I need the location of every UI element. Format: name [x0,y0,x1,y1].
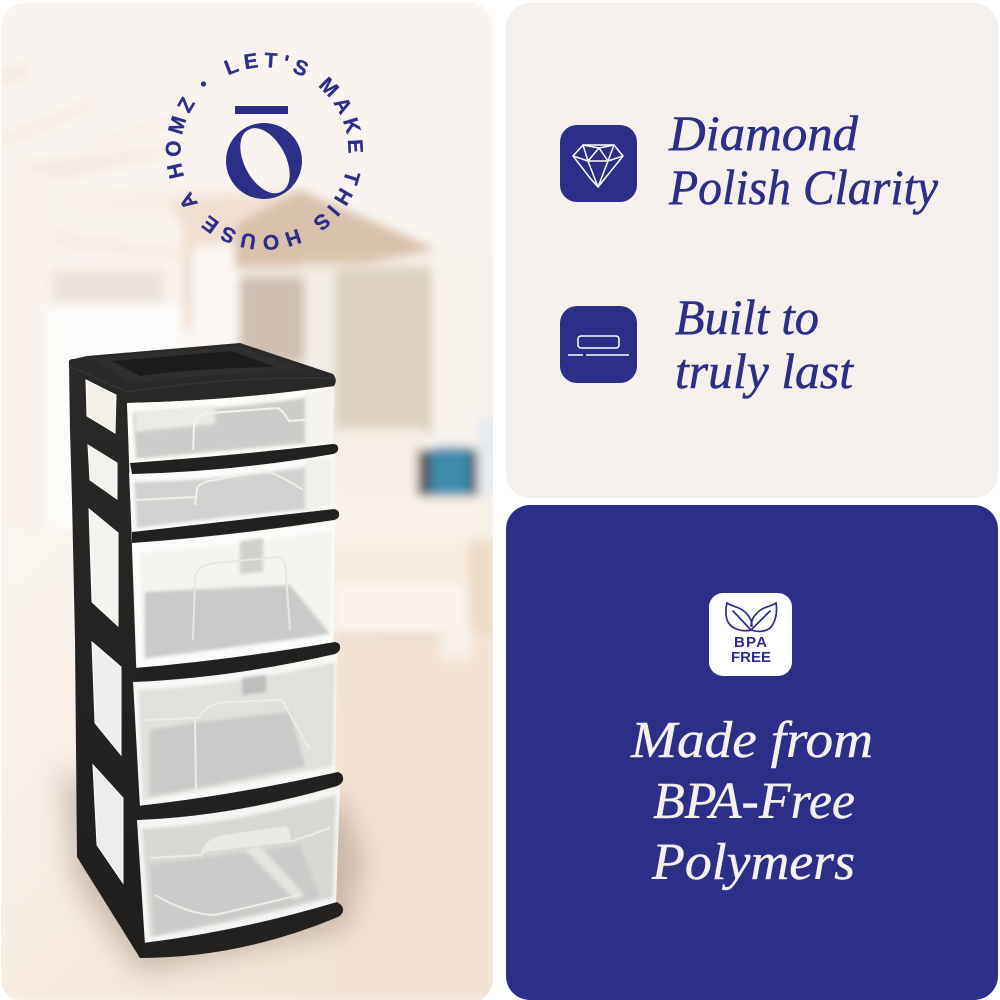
heading: made from bpa-free polymers: Made from [630,712,873,769]
product: five drawer unit [69,343,343,958]
drawer rails [130,444,343,958]
heading: made from bpa-free polymers: Polymers [651,834,855,891]
icon: bpa free badge: BPA [734,634,767,651]
heading: diamond polish clarity: Polish Clarity [668,159,939,215]
icon: bpa free badge [709,593,792,676]
heading: built to truly last [675,289,854,399]
side windows [86,380,123,883]
unit frame [69,343,336,958]
heading: diamond polish clarity: Diamond [668,105,859,161]
icon: durable bar [560,306,637,383]
heading: built to truly last: Built to [675,289,819,345]
icon: bpa free badge: FREE [731,649,771,666]
floor shadow [62,770,362,972]
drawer 2 [129,455,334,534]
drawer 1 [127,387,334,465]
heading: made from bpa-free polymers [630,712,873,891]
heading: built to truly last: truly last [675,343,854,399]
drawer 4 [133,654,337,808]
icon: diamond [560,125,637,202]
drawer 5 [137,786,340,945]
panel: bpa free [506,505,998,1000]
heading: diamond polish clarity [668,105,939,215]
drawer 3 [132,522,335,670]
logo badge [166,52,364,250]
panel: room photo [0,0,497,1000]
panel: features [506,3,998,498]
circular slogan: LET'S MAKE THIS HOUSE A HOMZ [166,52,364,250]
top tray [69,346,335,392]
heading: made from bpa-free polymers: BPA-Free [653,773,855,830]
